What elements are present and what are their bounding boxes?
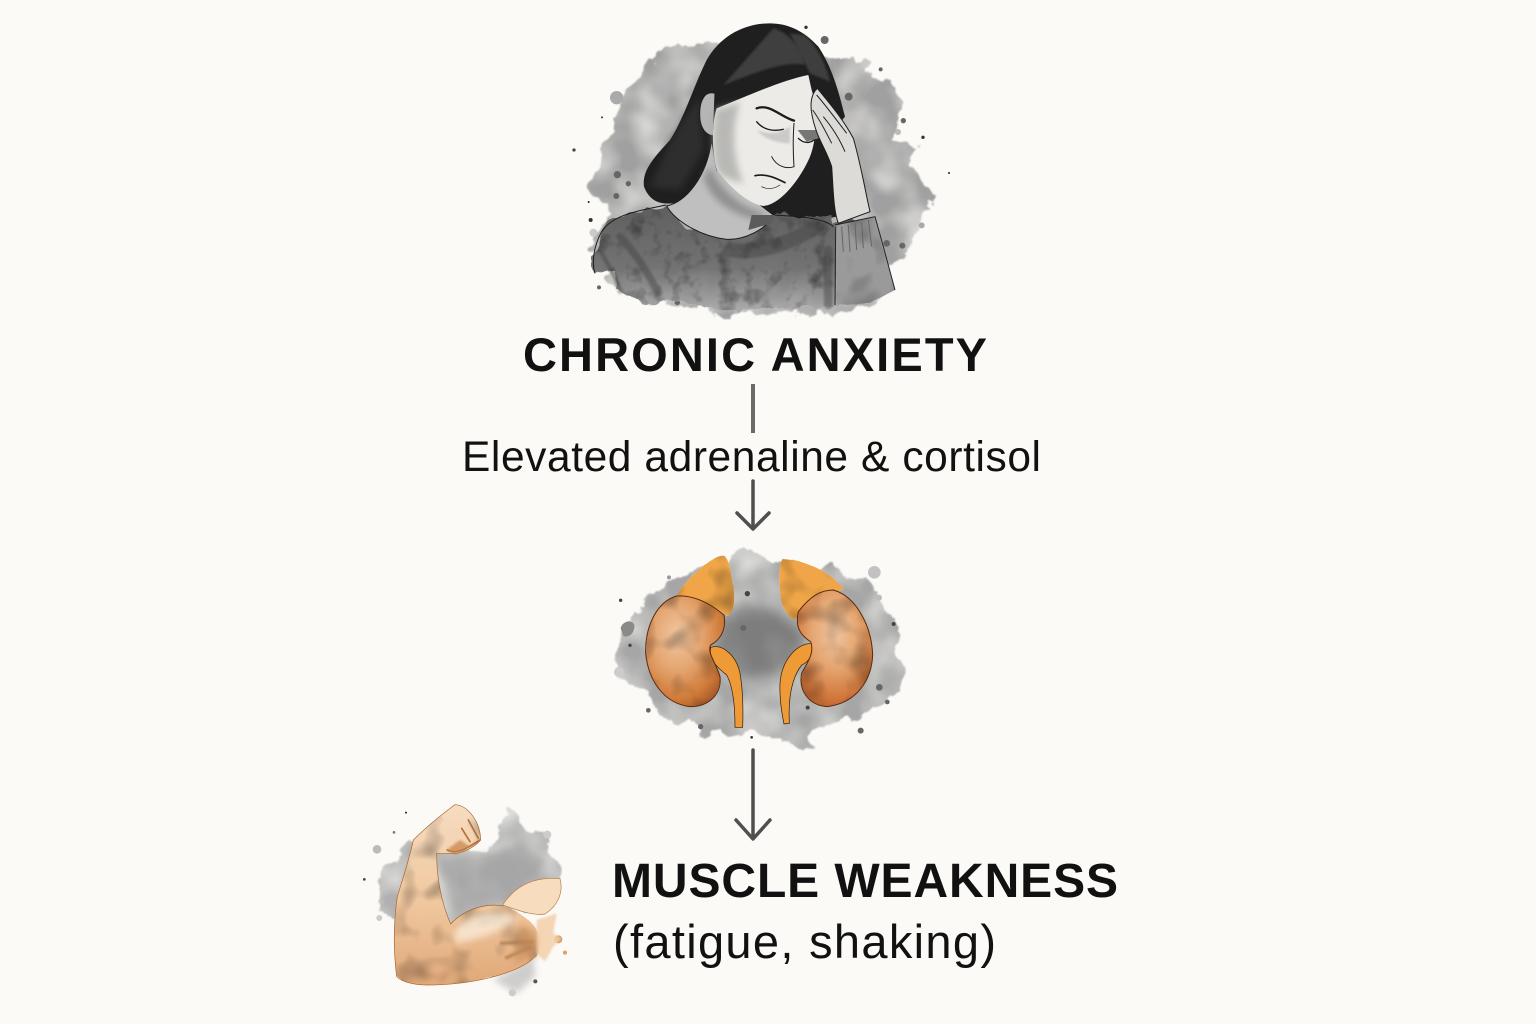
right kidney outline — [797, 590, 873, 707]
arm outline — [394, 805, 533, 985]
right adrenal gland — [779, 558, 844, 620]
icon: flexed arm — [363, 805, 567, 996]
splatter dots — [614, 566, 896, 739]
icon: woman with headache in grey watercolor — [572, 23, 950, 315]
heading: muscle weakness: MUSCLE WEAKNESS — [612, 855, 1118, 908]
text: symptoms: (fatigue, shaking) — [613, 915, 996, 968]
icon: kidneys and adrenal glands — [614, 553, 900, 747]
fist knuckles — [447, 820, 480, 852]
cheek shadow — [713, 102, 743, 183]
grey watercolor wash behind arm — [380, 817, 567, 927]
sweater folds — [600, 227, 828, 305]
faded shoulder edge — [537, 913, 562, 962]
biceps shadow strokes — [500, 942, 533, 958]
forearm and biceps — [394, 805, 540, 985]
finger lines — [813, 95, 847, 152]
left adrenal gland — [676, 556, 734, 616]
hair highlight at parting — [723, 28, 805, 85]
right kidney — [797, 590, 873, 707]
ear — [700, 93, 715, 136]
left kidney outline — [646, 596, 725, 707]
sweater outlines — [593, 205, 833, 273]
ink splatter dots — [572, 26, 950, 308]
ink wash behind woman — [590, 43, 933, 315]
left kidney — [646, 596, 725, 707]
biceps highlight — [455, 913, 517, 943]
face — [713, 75, 816, 206]
arrow: to kidneys — [737, 481, 769, 529]
sweater — [593, 205, 853, 312]
neck and chest — [667, 140, 773, 239]
heading: chronic anxiety: CHRONIC ANXIETY — [523, 328, 987, 381]
torso stub — [503, 878, 561, 914]
sleeve and ribbed cuff — [835, 217, 895, 305]
right ureter — [780, 643, 813, 724]
splatter dots — [363, 812, 567, 996]
long dark hair — [644, 23, 845, 223]
arrow: to muscle — [736, 750, 770, 839]
arrow: anxiety stem — [751, 384, 755, 433]
grey watercolor wash behind kidneys — [620, 553, 900, 747]
facial features: brow, eyes, nose, mouth — [755, 107, 818, 188]
text: hormones: Elevated adrenaline & cortisol — [462, 434, 1041, 481]
hand on forehead — [811, 88, 870, 223]
left ureter — [710, 647, 743, 727]
